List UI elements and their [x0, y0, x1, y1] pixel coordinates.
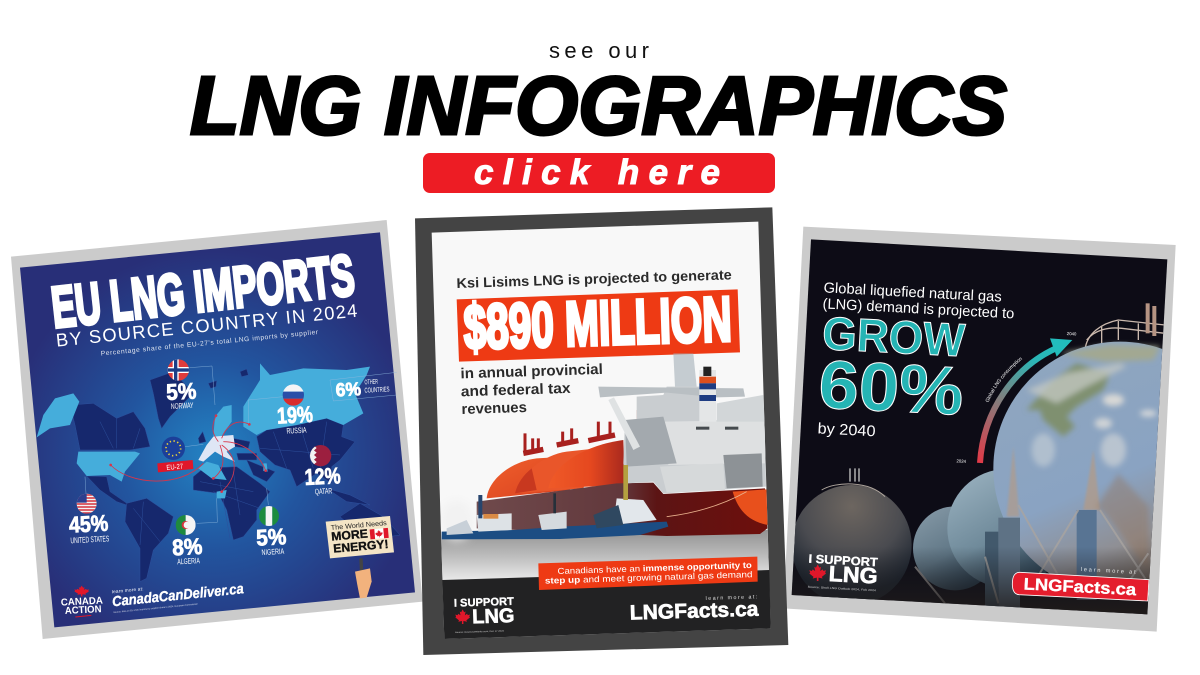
header: see our: see our — [549, 38, 649, 63]
tank vents — [1146, 303, 1156, 336]
button: click here: click here — [474, 153, 720, 192]
bottom fade — [792, 551, 1150, 614]
text: tax revenues: and federal tax — [461, 381, 572, 400]
caption: percentage share: Percentage share of the EU-27's total LNG imports by supplier — [101, 329, 319, 358]
stat: Norway 5%: NORWAY — [171, 401, 194, 411]
red banner: $890 million: $890 MILLION — [463, 285, 733, 363]
flag: EU — [162, 437, 185, 460]
arrow: consumption growth: 2024 — [956, 458, 967, 464]
logo: Canada Action: ACTION — [65, 604, 102, 617]
protest sign: The World Needs More Energy — [326, 516, 394, 598]
panel: Global LNG demand poster — [786, 226, 1176, 632]
arrow: consumption growth: 2040 — [1067, 331, 1077, 337]
text: by 2040: by 2040 — [817, 420, 876, 440]
link: LNGFacts.ca: learn more at: — [706, 594, 757, 602]
stat: other countries 6%: OTHER — [364, 379, 378, 386]
link: LNGFacts.ca — [1012, 567, 1149, 601]
protest sign: The World Needs More Energy: The World Needs — [331, 520, 387, 532]
stat: Norway 5%: 5% — [166, 377, 197, 405]
map leader lines — [85, 366, 397, 523]
hull bow paint — [733, 489, 768, 525]
link: LNGFacts.ca: learn more at — [1081, 567, 1136, 576]
logo: Canada Action — [61, 586, 103, 617]
button: click here — [423, 153, 775, 193]
flag: Russia — [282, 384, 304, 406]
red banner: $890 million — [457, 285, 740, 363]
small tank: centre — [913, 506, 980, 590]
poster frame — [415, 207, 788, 655]
poster background — [20, 232, 415, 627]
heading: global demand: (LNG) demand is projected to — [822, 296, 1015, 322]
logo: I Support LNG — [454, 596, 515, 634]
link: CanadaCanDeliver.ca: CanadaCanDeliver.ca — [111, 581, 244, 610]
label: EU-27 — [157, 460, 193, 472]
red callout: Canadians have an immense opportunity to — [557, 560, 752, 576]
panel: Ksi Lisims LNG poster — [415, 207, 788, 655]
stat: Russia 19%: RUSSIA — [286, 426, 307, 436]
flag: Algeria — [176, 515, 196, 535]
small tank: right — [948, 470, 1047, 586]
flag: Qatar — [310, 445, 332, 466]
illustration: globe and storage tanks — [792, 303, 1164, 614]
small tank: left — [792, 468, 912, 605]
link: CanadaCanDeliver.ca: Source: data on EU LNG imports by supplier share in 2024, European Commission — [113, 602, 199, 614]
heading: global demand: Global liquefied natural gas — [823, 280, 1002, 306]
flag: United States — [77, 494, 97, 514]
heading: Ksi Lisims: Ksi Lisims LNG is projected to generate — [456, 266, 732, 291]
protest sign: The World Needs More Energy: ENERGY! — [333, 537, 389, 556]
supply route lines — [111, 416, 266, 492]
tank support legs — [915, 447, 1148, 608]
stat: Nigeria 5%: NIGERIA — [261, 547, 285, 557]
logo: I Support LNG: Source: ResourceWorks.com, Dec 17 2024 — [455, 629, 505, 634]
stat: United States 45%: 45% — [68, 510, 109, 538]
stat: Qatar 12% — [304, 462, 341, 496]
stat: Algeria 8%: ALGERIA — [177, 556, 201, 566]
logo: I Support LNG: LNG — [472, 605, 515, 628]
poster frame — [11, 220, 423, 639]
cargo domes — [487, 440, 625, 498]
stat: Qatar 12%: QATAR — [315, 486, 333, 496]
stat: other countries 6% — [335, 378, 390, 400]
hull — [477, 483, 767, 536]
globe — [993, 342, 1162, 592]
logo: I Support LNG: I SUPPORT — [454, 596, 514, 610]
stat: Russia 19%: 19% — [276, 401, 314, 429]
tank railing — [1085, 320, 1165, 350]
headline: GROW: GROW — [821, 307, 966, 366]
label: EU-27: EU-27 — [166, 462, 183, 472]
illustration: LNG carrier and tugs — [440, 353, 769, 582]
stat: other countries 6%: COUNTRIES — [364, 386, 390, 395]
protest sign: The World Needs More Energy: MORE — [331, 527, 368, 544]
dark land masses — [70, 369, 400, 582]
flag: Nigeria — [258, 506, 280, 526]
red callout: step up and meet growing natural gas demand — [545, 569, 753, 586]
link: LNGFacts.ca: LNGFacts.ca — [1023, 574, 1137, 599]
tugboats — [440, 465, 668, 540]
text: tax revenues — [460, 362, 603, 418]
text: tax revenues: in annual provincial — [460, 362, 603, 382]
stat: Russia 19% — [276, 401, 314, 436]
red callout — [538, 557, 758, 590]
text: tax revenues: revenues — [461, 400, 527, 418]
world map — [37, 363, 400, 582]
masts on domes — [523, 410, 638, 453]
arrow: consumption growth: Global LNG consumption — [986, 358, 1022, 402]
flag: Norway — [168, 359, 189, 381]
highlighted land masses — [37, 363, 370, 498]
title: LNG INFOGRAPHICS: LNG INFOGRAPHICS — [190, 59, 1007, 152]
logo: I Support LNG: Source: Shell LNG Outlook 2024, Feb 2024 — [808, 585, 877, 592]
stat: other countries 6%: 6% — [335, 378, 362, 400]
panel: EU LNG imports poster — [11, 220, 423, 639]
subtitle: by source country: BY SOURCE COUNTRY IN 2024 — [55, 300, 358, 351]
funnel — [699, 367, 716, 422]
stat: Qatar 12%: 12% — [304, 462, 341, 490]
dark footer — [442, 570, 771, 639]
internal borders — [100, 418, 340, 545]
stat: United States 45%: UNITED STATES — [70, 533, 110, 545]
superstructure — [598, 353, 766, 493]
water — [441, 530, 769, 582]
title: EU LNG IMPORTS: EU LNG IMPORTS — [48, 244, 358, 341]
headline: 60%: 60% — [817, 346, 965, 430]
heading: global demand — [822, 280, 1015, 322]
stat: Nigeria 5%: 5% — [256, 523, 287, 551]
poster background — [792, 239, 1167, 614]
logo: I Support LNG: I SUPPORT — [808, 552, 879, 569]
logo: Canada Action: CANADA — [61, 595, 103, 609]
stat: Algeria 8%: 8% — [172, 533, 203, 560]
logo: I Support LNG: LNG — [828, 561, 878, 589]
link: CanadaCanDeliver.ca: learn more at: — [112, 586, 144, 594]
link: LNGFacts.ca: LNGFacts.ca — [629, 598, 759, 625]
poster frame — [783, 227, 1176, 632]
globe land and clouds — [1027, 345, 1160, 467]
poster background — [432, 222, 771, 639]
arrow: consumption growth — [956, 331, 1077, 464]
logo: I Support LNG — [808, 552, 879, 592]
route end points — [109, 414, 267, 493]
EU-27 highlight — [198, 435, 235, 462]
